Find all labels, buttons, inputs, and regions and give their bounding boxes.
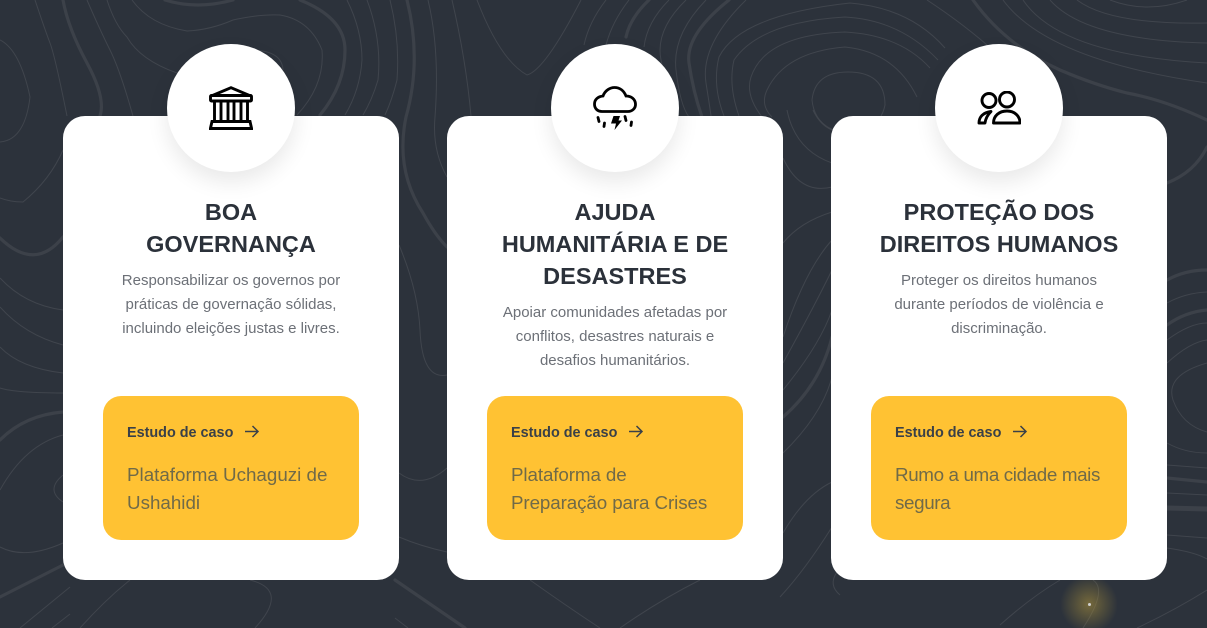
icon: arrow	[629, 426, 643, 438]
case study label: Estudo de caso	[511, 425, 617, 441]
case study name: Preparação para Crises	[511, 492, 707, 513]
case study name: Plataforma de	[511, 464, 627, 485]
case study name: Ushahidi	[127, 492, 200, 513]
case study name: Plataforma Uchaguzi de	[127, 464, 327, 485]
panel: proteção dos direitos humanos	[831, 116, 1167, 580]
title: DIREITOS HUMANOS	[880, 231, 1118, 257]
icon circle: people	[935, 44, 1063, 172]
title: BOA	[205, 199, 257, 225]
icon: bank building	[209, 86, 253, 130]
title: HUMANITÁRIA E DE	[502, 231, 728, 257]
title: DESASTRES	[543, 263, 687, 289]
description: discriminação.	[951, 320, 1047, 337]
icon: arrow	[1013, 426, 1027, 438]
title: GOVERNANÇA	[146, 231, 316, 257]
title	[502, 199, 728, 289]
title	[146, 199, 316, 257]
callout: case study	[487, 396, 743, 540]
callout: case study	[871, 396, 1127, 540]
panel: boa governança	[63, 116, 399, 580]
case study name: segura	[895, 492, 950, 513]
case study label: Estudo de caso	[895, 425, 1001, 441]
description	[122, 272, 340, 337]
icon: arrow	[245, 426, 259, 438]
description: Responsabilizar os governos por	[122, 272, 340, 289]
description: desafios humanitários.	[540, 352, 690, 369]
case study name: Rumo a uma cidade mais	[895, 464, 1100, 485]
glow: light spot	[1059, 574, 1119, 628]
title	[880, 199, 1118, 257]
case study name	[895, 464, 1100, 513]
description: conflitos, desastres naturais e	[516, 328, 714, 345]
description: práticas de governação sólidas,	[126, 296, 336, 313]
description: Apoiar comunidades afetadas por	[503, 304, 727, 321]
description	[503, 304, 727, 369]
case study name	[511, 464, 707, 513]
case study name	[127, 464, 327, 513]
case study label: Estudo de caso	[127, 425, 233, 441]
description: durante períodos de violência e	[894, 296, 1104, 313]
glow centre dot	[1088, 603, 1091, 606]
title: AJUDA	[575, 199, 655, 225]
icon circle: storm	[551, 44, 679, 172]
panel: ajuda humanitária	[447, 116, 783, 580]
callout: case study	[103, 396, 359, 540]
icon circle: bank	[167, 44, 295, 172]
icon: storm cloud	[593, 86, 637, 130]
icon: two people	[978, 91, 1021, 124]
description	[894, 272, 1104, 337]
title: PROTEÇÃO DOS	[904, 199, 1094, 225]
description: incluindo eleições justas e livres.	[122, 320, 340, 337]
description: Proteger os direitos humanos	[901, 272, 1097, 289]
